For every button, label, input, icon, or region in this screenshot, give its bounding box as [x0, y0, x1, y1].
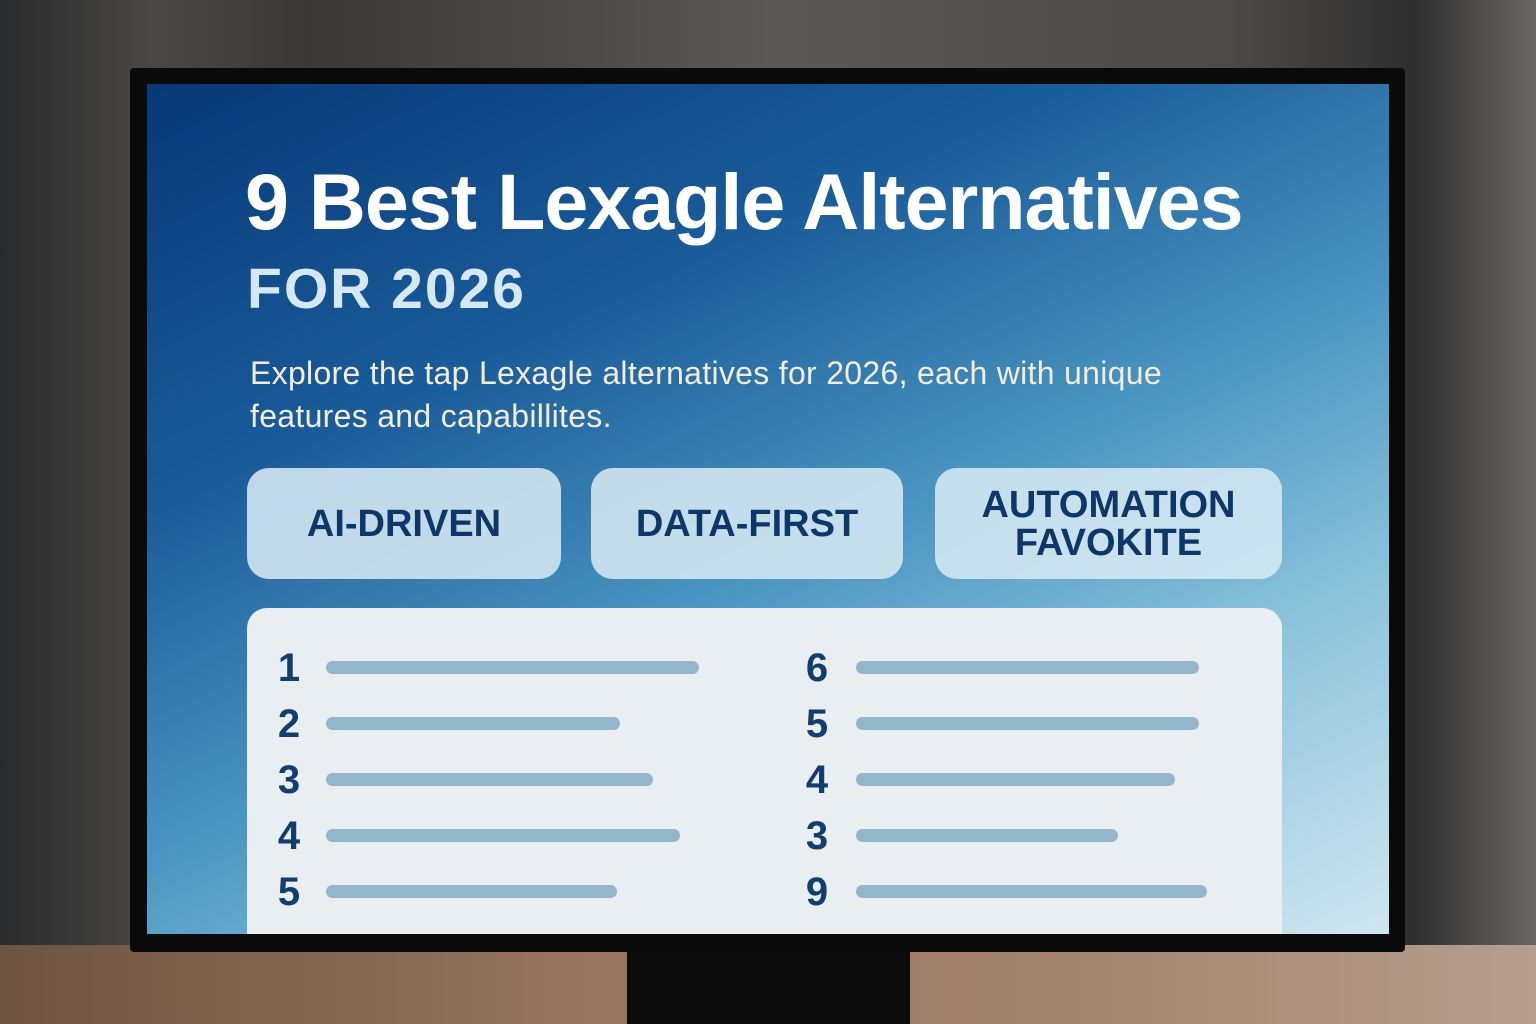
right column: 5	[806, 702, 828, 746]
left column: 2	[278, 702, 300, 746]
list panel	[247, 608, 1282, 934]
right column: 3	[806, 814, 828, 858]
right column	[806, 646, 1207, 914]
right column: 4	[806, 758, 828, 802]
left column: 1	[278, 646, 300, 690]
pill: data-first: DATA-FIRST	[636, 502, 858, 544]
left column	[278, 646, 699, 914]
pill: automation favokite: AUTOMATION	[981, 484, 1236, 526]
pill: automation favokite	[935, 468, 1282, 579]
right column: 6	[806, 646, 828, 690]
left column: 5	[278, 870, 300, 914]
left column: 4	[278, 814, 300, 858]
title: 9 Best Lexagle Alternatives	[245, 157, 1243, 246]
monitor stand	[627, 948, 910, 1024]
pill: automation favokite: FAVOKITE	[1015, 522, 1202, 564]
pill: AI-driven	[247, 468, 561, 579]
left column: 3	[278, 758, 300, 802]
right column: 9	[806, 870, 828, 914]
subtitle year: FOR 2026	[247, 257, 526, 321]
pill: AI-driven: AI-DRIVEN	[307, 502, 501, 544]
pill: data-first	[591, 468, 903, 579]
screen	[147, 84, 1389, 934]
description: Explore the tap Lexagle alternatives for 2026, each with unique features and capabillites.	[250, 355, 1162, 434]
monitor	[130, 68, 1405, 952]
desk	[0, 945, 1536, 1024]
